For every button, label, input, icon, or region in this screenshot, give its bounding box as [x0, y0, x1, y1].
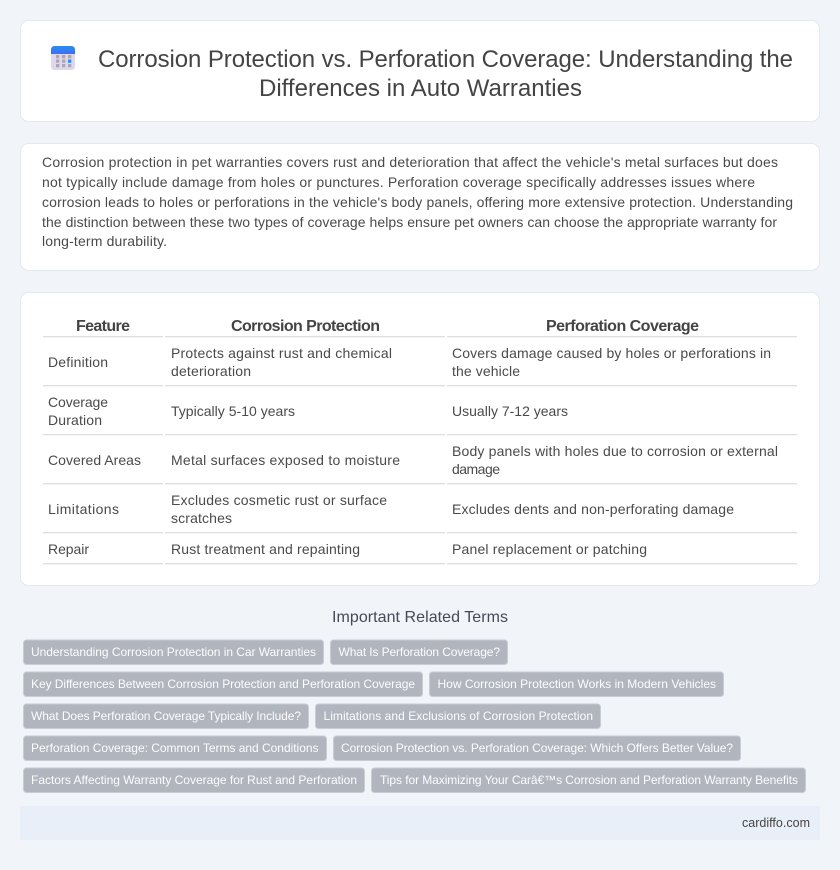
tag: What Does Perforation Coverage Typically Include?	[31, 709, 301, 723]
table row: coverage duration: Typically 5-10 years	[171, 403, 295, 419]
table row: definition: deterioration	[171, 363, 251, 379]
panel: comparison table	[20, 292, 820, 586]
tag	[372, 768, 806, 792]
table row: limitations	[48, 492, 734, 526]
table row: covered areas: Metal surfaces exposed to moisture	[171, 452, 400, 468]
table row: definition: Protects against rust and chemical	[171, 345, 392, 361]
table header row: Corrosion Protection	[231, 318, 380, 335]
table header row: Perforation Coverage	[546, 318, 699, 335]
table row: definition: the vehicle	[452, 363, 520, 379]
text block: description paragraph: not typically include damage from holes or punctures. Perforation coverage specifically addresses issues where	[42, 174, 755, 190]
table row: definition: Definition	[48, 354, 108, 370]
table row: covered areas: damage	[452, 461, 500, 477]
text block: description paragraph: long-term durability.	[42, 233, 167, 249]
tag	[330, 640, 508, 664]
table row: limitations: Excludes cosmetic rust or surface	[171, 492, 387, 508]
tag	[430, 672, 724, 696]
table row: repair	[48, 541, 647, 557]
tag	[24, 704, 308, 728]
tag: Key Differences Between Corrosion Protection and Perforation Coverage	[31, 677, 415, 691]
tag	[24, 736, 326, 760]
table row: coverage duration	[48, 394, 568, 428]
tag: Understanding Corrosion Protection in Car Warranties	[31, 645, 316, 659]
tag: Perforation Coverage: Common Terms and Conditions	[31, 741, 318, 755]
tag: What Is Perforation Coverage?	[338, 645, 500, 659]
footer	[20, 806, 820, 840]
tag: Tips for Maximizing Your Carâ€™s Corrosion and Perforation Warranty Benefits	[380, 773, 798, 787]
table row: definition: Covers damage caused by holes or perforations in	[452, 345, 771, 361]
text block: description paragraph: the distinction between these two types of coverage helps ensure pet owners can choose the appropriate warranty for	[42, 214, 777, 230]
table row: limitations: Limitations	[48, 501, 119, 517]
icon: calendar	[51, 46, 75, 70]
table row: repair: Rust treatment and repainting	[171, 541, 360, 557]
table row: coverage duration: Coverage	[48, 394, 108, 410]
tag	[334, 736, 740, 760]
panel: description	[20, 144, 820, 270]
tag: Factors Affecting Warranty Coverage for Rust and Perforation	[31, 773, 357, 787]
tag	[24, 672, 422, 696]
table row: repair: Repair	[48, 541, 89, 557]
table row: limitations: Excludes dents and non-perforating damage	[452, 501, 734, 517]
footer: cardiffo.com	[742, 816, 810, 830]
tag: Limitations and Exclusions of Corrosion Protection	[324, 709, 593, 723]
tag list	[24, 640, 806, 792]
table header row	[76, 318, 699, 335]
tag: Corrosion Protection vs. Perforation Coverage: Which Offers Better Value?	[341, 741, 733, 755]
text block: description paragraph: corrosion leads to holes or perforations in the vehicle's body panels, offering more extensive protection. Understanding	[42, 194, 793, 210]
table row: covered areas: Body panels with holes due to corrosion or external	[452, 443, 778, 459]
tag	[24, 768, 364, 792]
table row: limitations: scratches	[171, 510, 232, 526]
heading: important related terms: Important Related Terms	[332, 609, 508, 626]
table row: coverage duration: Usually 7-12 years	[452, 403, 568, 419]
text block: description paragraph	[42, 154, 793, 249]
tag	[316, 704, 600, 728]
table row: definition	[48, 345, 771, 379]
table row: repair: Panel replacement or patching	[452, 541, 647, 557]
title: Differences in Auto Warranties	[259, 75, 582, 102]
title: Corrosion Protection vs. Perforation Coverage: Understanding the	[98, 46, 793, 73]
table row: coverage duration: Duration	[48, 412, 102, 428]
tag: How Corrosion Protection Works in Modern Vehicles	[438, 677, 716, 691]
header card	[20, 20, 820, 122]
table row: covered areas: Covered Areas	[48, 452, 141, 468]
table row: covered areas	[48, 443, 778, 477]
table header row: Feature	[76, 318, 130, 335]
text block: description paragraph: Corrosion protection in pet warranties covers rust and deterioration that affect the vehicle's metal surfaces but does	[42, 154, 778, 170]
title	[98, 46, 793, 102]
tag	[24, 640, 324, 664]
